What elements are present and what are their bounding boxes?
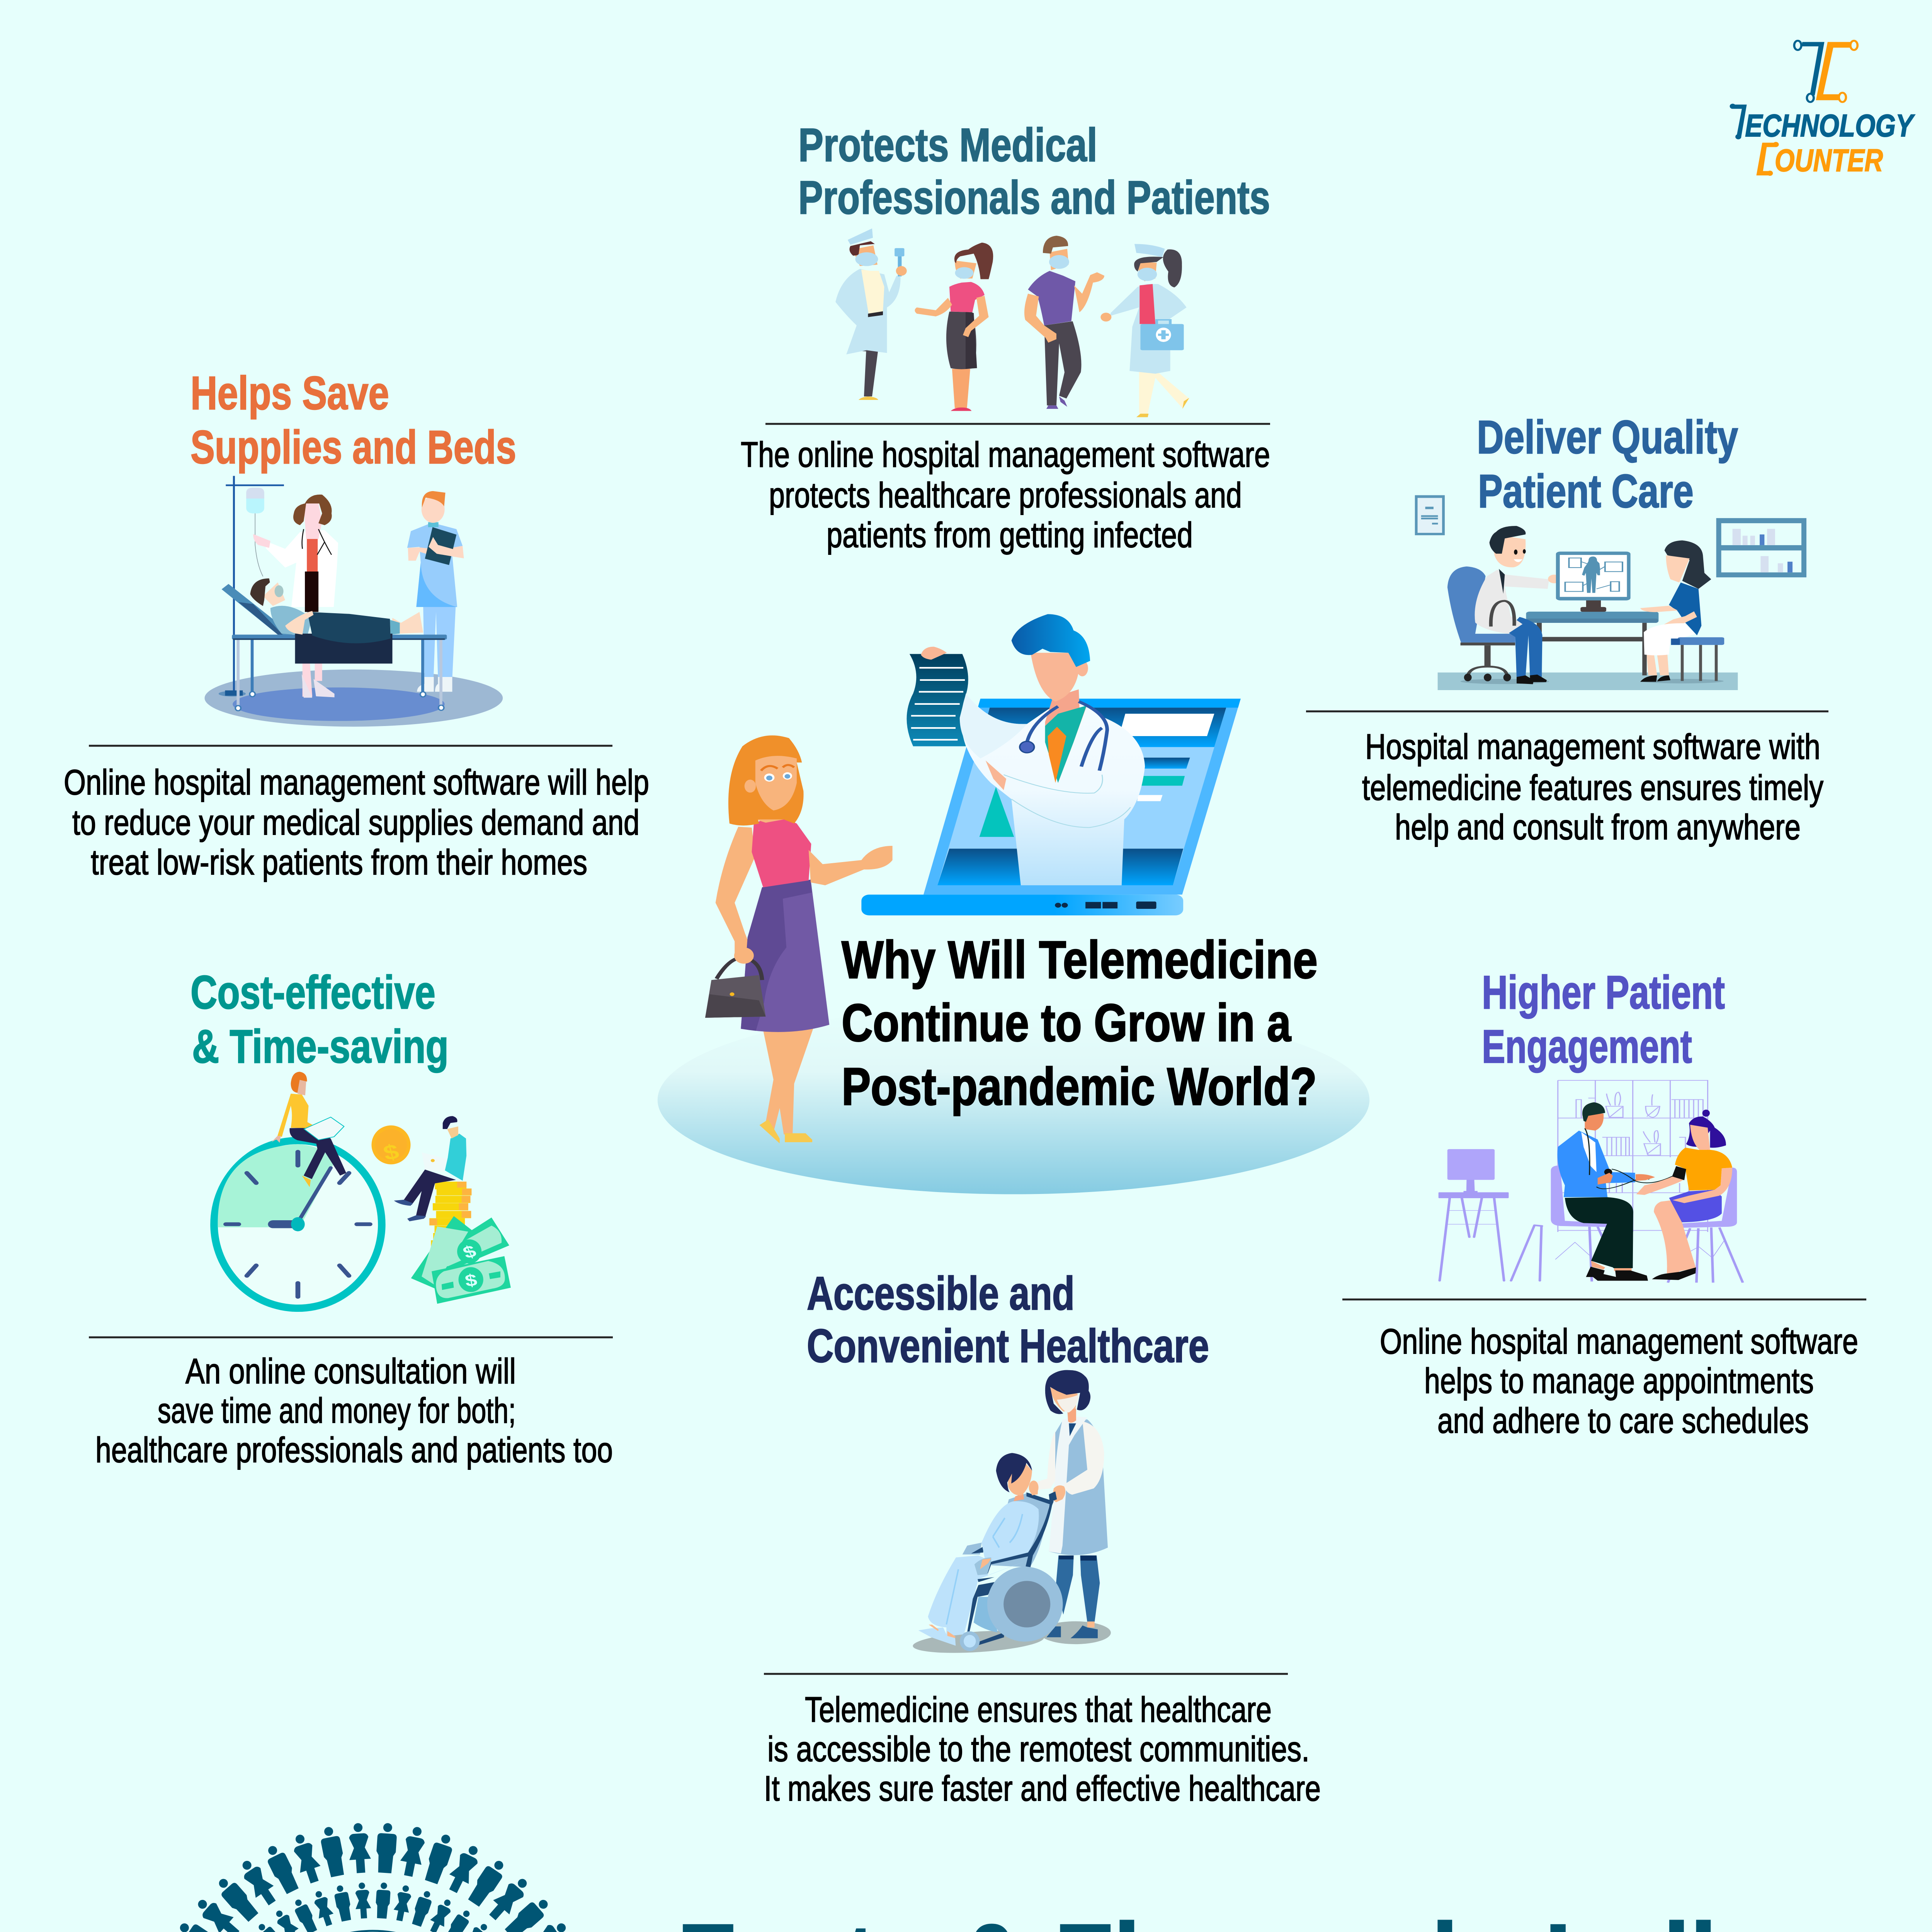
circle cutout	[133, 1819, 612, 1932]
chairs	[1551, 1165, 1609, 1227]
body text: and adhere to care schedules	[1437, 1401, 1809, 1440]
heading: Cost-effective	[190, 966, 435, 1019]
monitor	[1586, 600, 1601, 608]
panel: protects medical professionals and patients	[741, 119, 1270, 555]
doctor coat	[960, 694, 1145, 885]
panel: facts and figures in India	[77, 1819, 1861, 1932]
heading: Engagement	[1482, 1020, 1692, 1073]
patient	[391, 612, 423, 634]
heading: Patient Care	[1478, 465, 1694, 517]
heading: Accessible and	[807, 1267, 1075, 1320]
illustration: doctor taking blood pressure	[1439, 1080, 1743, 1282]
clock	[210, 1137, 386, 1312]
body text: help and consult from anywhere	[1395, 808, 1801, 847]
divider	[89, 1336, 613, 1338]
wheelchair and patient	[963, 1543, 981, 1554]
panel: central telemedicine illustration and title	[658, 614, 1369, 1194]
heading	[798, 119, 1270, 224]
panel: accessible and convenient healthcare	[764, 1267, 1321, 1808]
panel: higher patient engagement	[1342, 966, 1866, 1440]
illustration: four masked people	[835, 228, 1189, 417]
stethoscope	[1027, 702, 1107, 770]
body text	[741, 435, 1270, 555]
heading	[1477, 411, 1738, 517]
divider	[765, 423, 1270, 425]
body text: to reduce your medical supplies demand and	[72, 803, 639, 842]
patient head	[1014, 1493, 1024, 1501]
bookshelf	[1558, 1080, 1708, 1232]
illustration: clock, coins and money: $	[464, 1270, 478, 1290]
people ring: inner	[201, 1882, 544, 1932]
wall chart	[1415, 495, 1445, 535]
coin	[371, 1125, 411, 1164]
body text: patients from getting infected	[827, 515, 1193, 555]
illustration: patient on hospital bed with doctor and nurse	[204, 476, 503, 727]
heading: Supplies and Beds	[190, 421, 516, 473]
illustration: doctor consulting patient at desk	[1415, 495, 1806, 690]
title: Continue to Grow in a	[842, 993, 1291, 1053]
illustration: clock, coins and money: $	[381, 1140, 401, 1165]
body text: The online hospital management software	[741, 435, 1270, 474]
heading: Protects Medical	[798, 119, 1097, 171]
heading	[190, 966, 449, 1073]
nurse 4	[1139, 324, 1189, 414]
heading: Helps Save	[190, 367, 389, 419]
panel: cost-effective and time-saving	[89, 966, 613, 1470]
IV stand	[226, 476, 284, 691]
inner circle outline	[250, 1931, 496, 1932]
coin stack	[429, 1182, 471, 1248]
title: Why Will Telemedicine	[842, 930, 1318, 990]
woman 2	[952, 369, 970, 408]
divider	[1306, 710, 1828, 713]
heading	[1482, 966, 1725, 1073]
illustration: nurse pushing wheelchair	[912, 1370, 1111, 1656]
body text: save time and money for both;	[158, 1391, 516, 1430]
body text: Telemedicine ensures that healthcare	[805, 1690, 1272, 1730]
banknotes	[411, 1216, 473, 1289]
laptop screen	[923, 699, 1241, 895]
body text: An online consultation will	[185, 1352, 516, 1391]
nurse	[423, 606, 456, 678]
illustration: doctor in laptop with woman	[658, 614, 1369, 1194]
body text	[1362, 727, 1823, 847]
man 3	[1044, 321, 1082, 405]
body text	[64, 763, 649, 882]
man on coins	[404, 1170, 456, 1218]
heading: Higher Patient	[1482, 966, 1725, 1019]
body text: treat low-risk patients from their homes	[91, 843, 587, 882]
body text: It makes sure faster and effective healthcare	[764, 1769, 1321, 1808]
doctor head	[1045, 689, 1087, 783]
heading: & Time-saving	[192, 1020, 449, 1073]
laptop base	[861, 895, 1183, 915]
panel: deliver quality patient care	[1306, 411, 1828, 847]
shelf with bottles	[1716, 518, 1806, 577]
people ring: outer	[141, 1822, 604, 1932]
title	[842, 930, 1318, 1116]
heading: Professionals and Patients	[798, 171, 1270, 224]
heading: Deliver Quality	[1477, 411, 1738, 463]
body text: is accessible to the remotest communities.	[767, 1730, 1310, 1769]
divider	[764, 1673, 1288, 1675]
logo: Technology Counter	[1729, 41, 1915, 178]
woman on clock	[289, 1128, 346, 1179]
woman	[763, 1027, 814, 1134]
patient	[1654, 1200, 1696, 1276]
illustration: clock, coins and money	[210, 1072, 511, 1312]
body text: healthcare professionals and patients too	[95, 1430, 613, 1470]
body text: helps to manage appointments	[1424, 1361, 1814, 1401]
desk	[1537, 622, 1647, 675]
nurse	[1056, 1556, 1100, 1622]
logo mark	[1730, 41, 1857, 176]
body text: telemedicine features ensures timely	[1362, 768, 1823, 808]
heading	[807, 1267, 1209, 1372]
desk with monitor	[1447, 1149, 1495, 1180]
body text	[95, 1352, 613, 1470]
title: Post-pandemic World?	[842, 1057, 1317, 1116]
heading: Convenient Healthcare	[807, 1320, 1209, 1372]
panel: helps save supplies and beds	[64, 367, 649, 882]
body text: Online hospital management software will help	[64, 763, 649, 802]
female doctor	[303, 661, 322, 697]
body text	[1380, 1322, 1858, 1440]
patient	[1647, 655, 1669, 675]
doctor	[1506, 617, 1543, 678]
divider	[89, 745, 612, 747]
doctor	[1565, 1197, 1633, 1268]
bed frame	[251, 639, 424, 692]
body text: Hospital management software with	[1365, 727, 1820, 767]
platform	[658, 1005, 1369, 1194]
heading	[190, 367, 516, 473]
divider	[1342, 1298, 1866, 1301]
report sheet	[906, 654, 968, 746]
illustration: clock, coins and money: $	[460, 1242, 479, 1262]
body text: protects healthcare professionals and	[769, 476, 1242, 515]
man 1	[859, 311, 883, 396]
body text	[764, 1690, 1321, 1808]
chair	[1447, 566, 1515, 643]
